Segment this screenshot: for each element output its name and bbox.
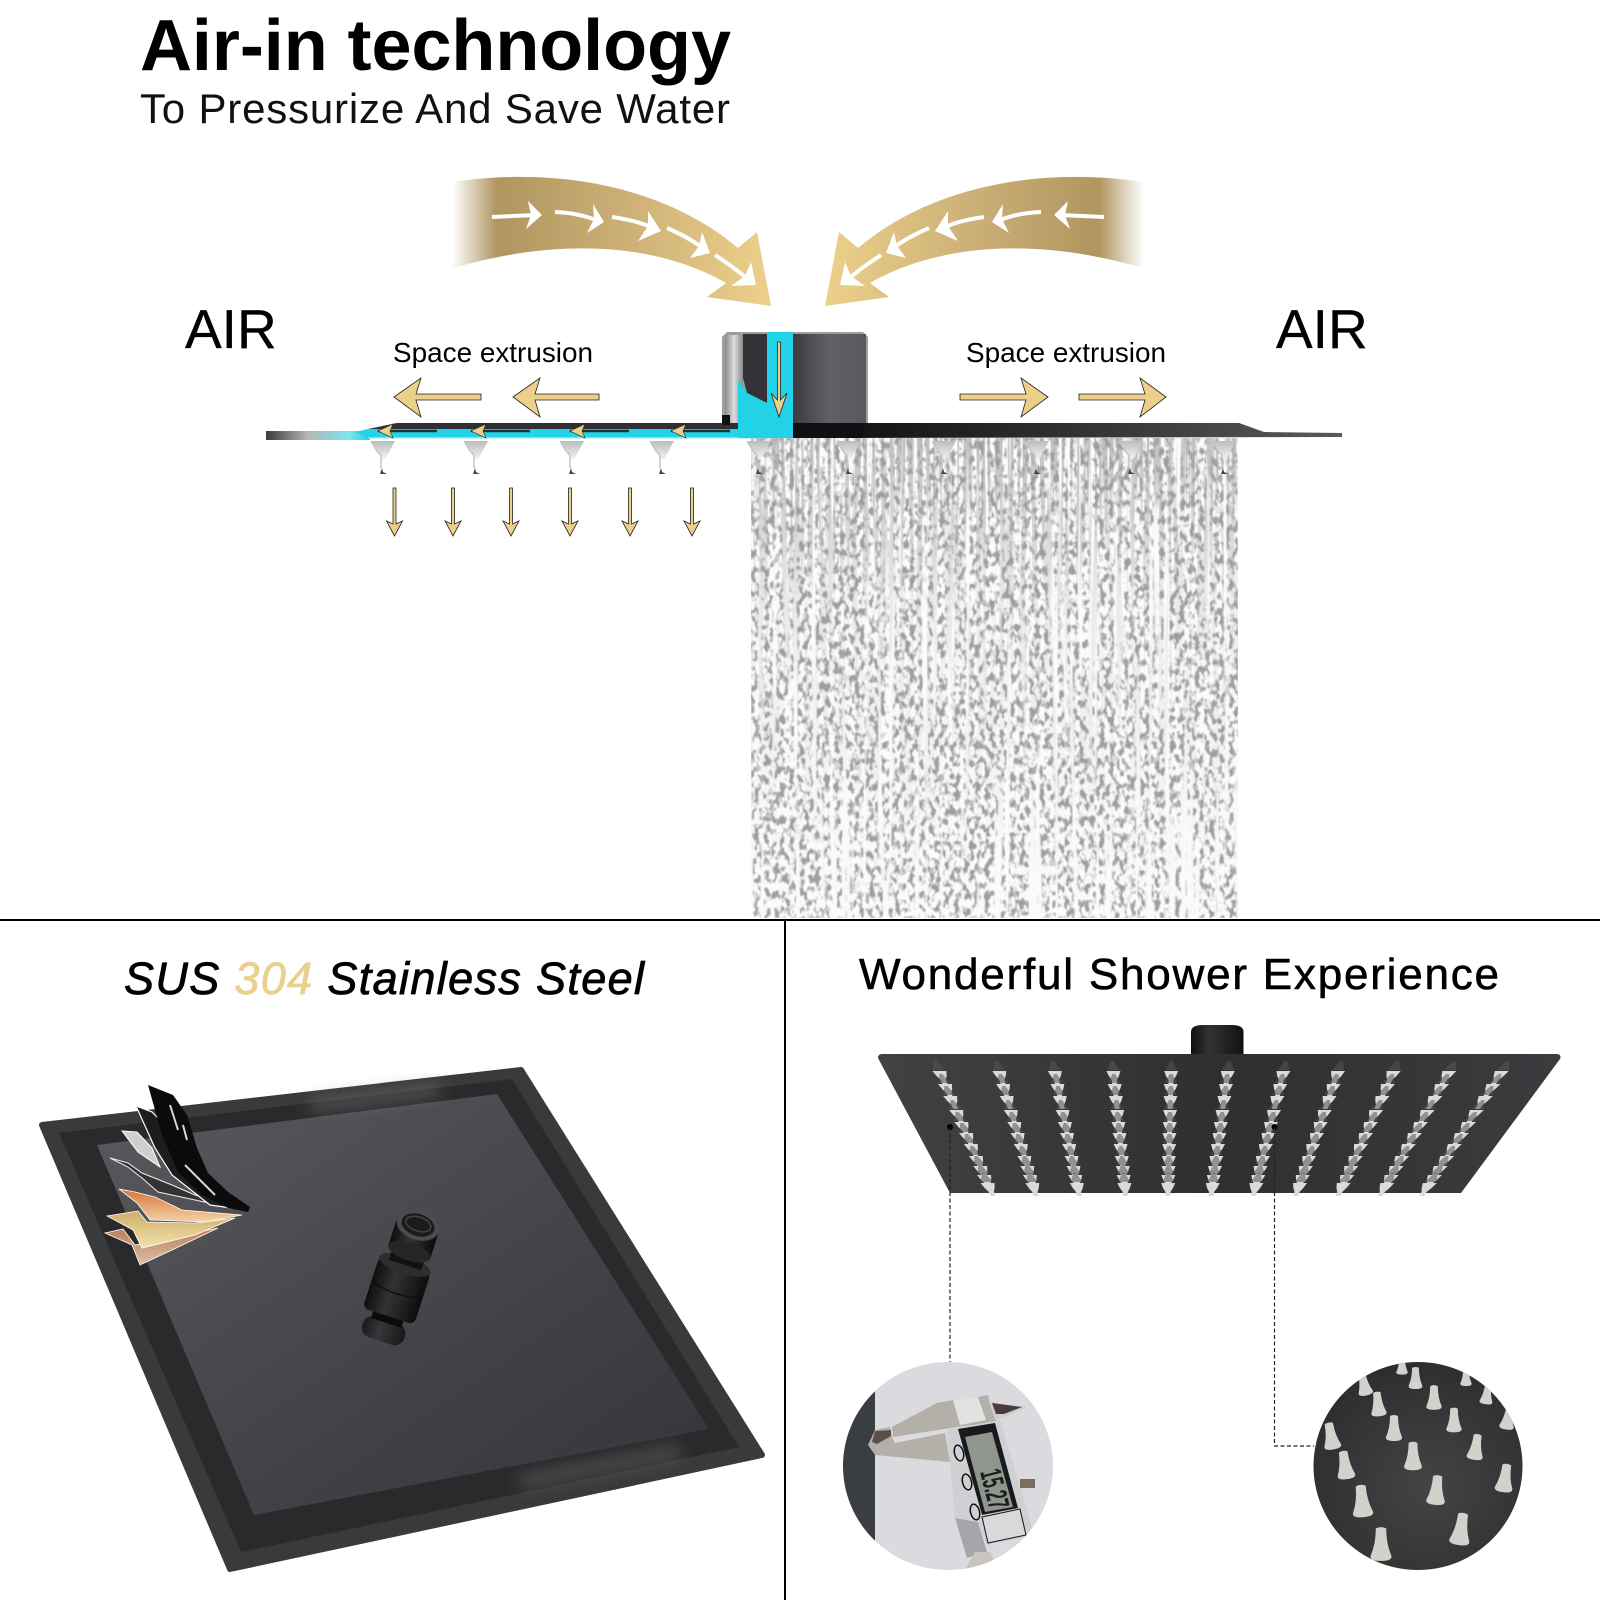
centre down arrow in channel	[771, 342, 787, 417]
shower arm stub	[1191, 1025, 1244, 1055]
left air inflow arrow	[440, 177, 771, 306]
shower head with nozzles	[878, 1054, 1560, 1196]
label: Space extrusion right: Space extrusion	[966, 337, 1166, 368]
dashed leader to caliper	[947, 1124, 953, 1362]
gold arrows pointing left	[394, 378, 599, 417]
shower plate cross-section	[266, 423, 1342, 440]
gold arrows pointing right	[960, 378, 1166, 417]
panel: SUS 304 stainless steel	[42, 953, 762, 1569]
falling water spray	[751, 438, 1238, 918]
title: Air-in technology: Air-in technology	[140, 6, 731, 86]
heading: Wonderful Shower Experience	[859, 950, 1499, 999]
nozzles under plate	[371, 441, 1236, 474]
coating layers icon	[105, 1085, 250, 1265]
heading: SUS 304 Stainless Steel	[124, 953, 646, 1004]
shower arm block with cyan water channel	[722, 332, 868, 438]
panel: wonderful shower experience	[840, 950, 1560, 1572]
vertical divider	[784, 920, 786, 1600]
flow arrows inside plate	[378, 424, 730, 438]
horizontal divider	[0, 919, 1600, 921]
dashed leader to nozzle detail	[1272, 1124, 1314, 1446]
panel: air-in diagram	[185, 177, 1368, 918]
threaded fitting	[355, 1202, 448, 1349]
label: AIR left: AIR	[185, 298, 277, 360]
nozzle detail circle	[1310, 1356, 1526, 1572]
label: Space extrusion left: Space extrusion	[393, 337, 593, 368]
caliper detail circle	[840, 1360, 1060, 1572]
caliper detail circle: 15.27	[973, 1466, 1015, 1513]
small down arrows	[386, 488, 700, 536]
label: AIR right: AIR	[1276, 298, 1368, 360]
black square shower plate	[42, 1070, 762, 1569]
subtitle: To Pressurize And Save Water	[140, 85, 730, 132]
right air inflow arrow	[825, 177, 1156, 306]
